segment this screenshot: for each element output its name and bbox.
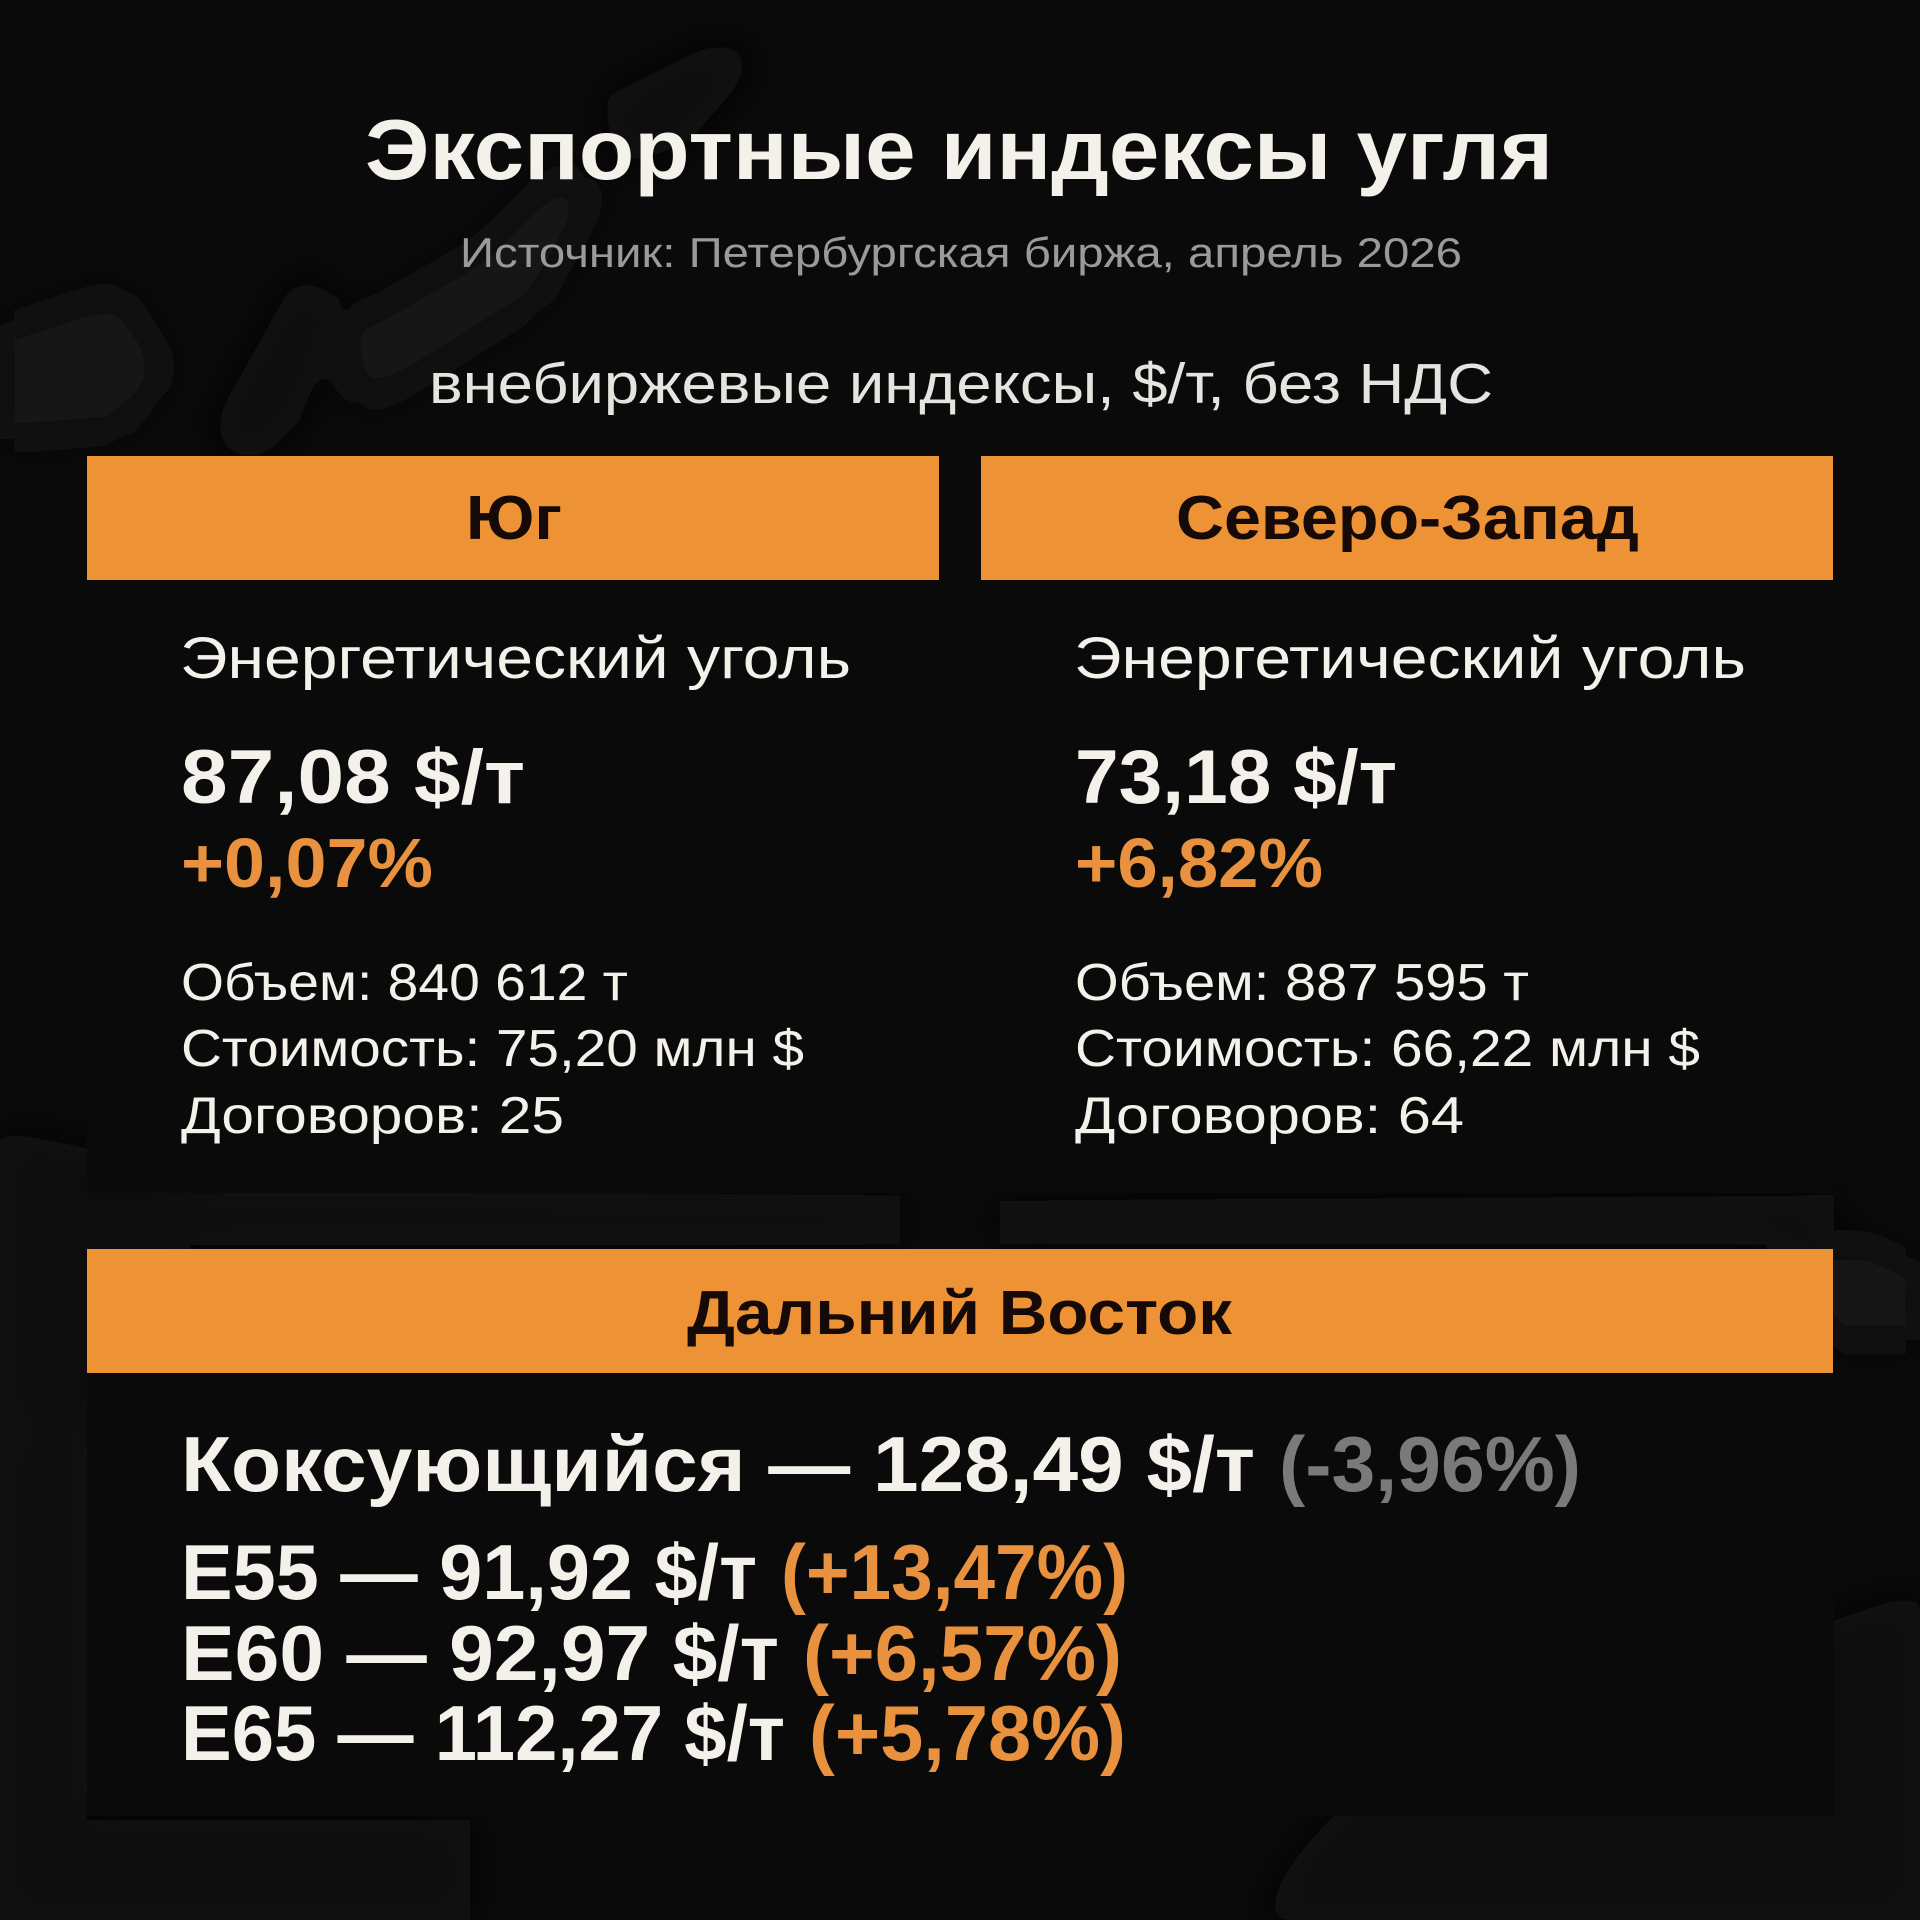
- row: E55: (+13,47%): [781, 1528, 1128, 1616]
- price: 87,08 $/т: [181, 735, 525, 820]
- stats: Стоимость: 66,22 млн $: [1075, 1020, 1700, 1078]
- stats: Договоров: 25: [181, 1087, 564, 1145]
- stats: [181, 954, 804, 1145]
- stats: Стоимость: 75,20 млн $: [181, 1020, 804, 1078]
- label: thermal coal: Энергетический уголь: [180, 626, 851, 691]
- change: +6,82%: [1075, 824, 1323, 902]
- change: +0,07%: [181, 824, 433, 902]
- stats: Объем: 840 612 т: [181, 954, 628, 1012]
- row: E65: [181, 1689, 1126, 1777]
- stats: Договоров: 64: [1075, 1087, 1464, 1145]
- subtitle: внебиржевые индексы, $/т, без НДС: [429, 352, 1493, 416]
- row: E60: E60 — 92,97 $/т: [181, 1609, 779, 1697]
- row: E65: (+5,78%): [809, 1689, 1126, 1777]
- row: E60: (+6,57%): [803, 1609, 1122, 1697]
- panel: North-West: [981, 456, 1833, 1145]
- row: coking coal: Коксующийся — 128,49 $/т: [181, 1420, 1255, 1508]
- row: E55: [181, 1528, 1128, 1616]
- header bar: South: [87, 456, 939, 580]
- panel: Far East backdrop: [87, 1373, 1834, 1816]
- panel: Far East: [87, 1249, 1833, 1777]
- stats: Объем: 887 595 т: [1075, 954, 1529, 1012]
- header bar: Far East: [87, 1249, 1833, 1373]
- row: E65: E65 — 112,27 $/т: [181, 1689, 785, 1777]
- header bar: North-West: Северо-Запад: [1176, 484, 1639, 553]
- panel: South and North-West backdrop: [87, 580, 1834, 1193]
- label: thermal coal: Энергетический уголь: [1074, 626, 1746, 691]
- row: E60: [181, 1609, 1122, 1697]
- header bar: Far East: Дальний Восток: [687, 1279, 1233, 1348]
- stats: [1075, 954, 1700, 1145]
- source line: Источник: Петербургская биржа, апрель 2026: [460, 229, 1462, 276]
- row: coking coal: (-3,96%): [1279, 1420, 1581, 1508]
- header bar: North-West: [981, 456, 1833, 580]
- row: E55: E55 — 91,92 $/т: [181, 1528, 757, 1616]
- panel: South: [87, 456, 939, 1145]
- title: Экспортные индексы угля: [365, 103, 1553, 198]
- price: 73,18 $/т: [1075, 735, 1397, 820]
- header bar: South: Юг: [466, 484, 562, 553]
